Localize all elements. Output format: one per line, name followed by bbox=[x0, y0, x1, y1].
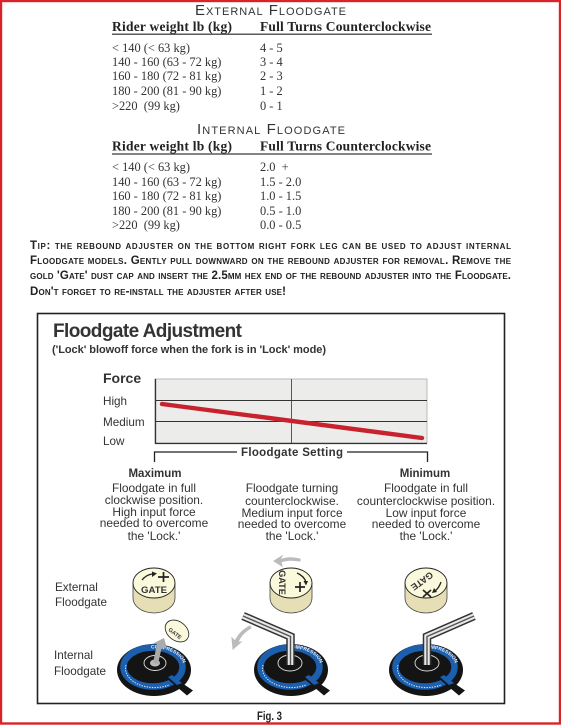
icon: internal disc maximum bbox=[117, 620, 193, 696]
column: middle bbox=[238, 481, 347, 543]
label: internal floodgate: Internal bbox=[54, 649, 93, 662]
figure caption: Fig. 3 bbox=[257, 709, 282, 723]
icon: external cap maximum bbox=[133, 568, 175, 613]
y axis labels bbox=[103, 395, 145, 448]
column: maximum: clockwise position. bbox=[105, 493, 203, 507]
table rows: external bbox=[112, 41, 283, 113]
tip text block: Don't forget to re-install the adjuster after use! bbox=[30, 286, 286, 298]
y axis title: Force bbox=[103, 370, 141, 386]
table header: external: Full Turns Counterclockwise bbox=[260, 19, 431, 34]
column: minimum: Low input force bbox=[386, 506, 467, 520]
y axis labels: Low bbox=[103, 435, 125, 448]
table rows: external: 160 - 180 (72 - 81 kg) bbox=[112, 69, 221, 83]
tip text block: Tip: the rebound adjuster on the bottom right fork leg can be used to adjust internal bbox=[30, 240, 511, 252]
y axis labels: High bbox=[103, 395, 127, 408]
grid lines and axes bbox=[155, 379, 427, 444]
red force line bbox=[162, 404, 422, 438]
column: maximum: needed to overcome bbox=[100, 516, 209, 530]
table header: internal bbox=[112, 138, 432, 155]
icon: internal disc maximum: COMPRESSION bbox=[151, 645, 186, 663]
plot background bbox=[155, 379, 427, 443]
table rows: internal: >220 (99 kg) bbox=[112, 218, 180, 232]
tip text block bbox=[30, 240, 512, 298]
icon: external cap middle: GATE bbox=[277, 570, 287, 595]
chart: force vs floodgate setting bbox=[103, 370, 428, 462]
table rows: external: < 140 (< 63 kg) bbox=[112, 41, 190, 55]
icon: internal disc minimum: COMPRESSION bbox=[431, 645, 458, 663]
table rows: external: 4 - 5 bbox=[260, 41, 283, 55]
column: maximum: High input force bbox=[112, 505, 196, 519]
icon: internal disc minimum bbox=[389, 644, 465, 696]
column: minimum: the 'Lock.' bbox=[400, 529, 452, 543]
table: internal floodgate bbox=[112, 121, 432, 232]
table header: internal: Full Turns Counterclockwise bbox=[260, 138, 431, 154]
table rows: internal: 0.0 - 0.5 bbox=[260, 218, 301, 232]
table rows: external: 0 - 1 bbox=[260, 99, 283, 113]
icon: external cap minimum: GATE bbox=[409, 570, 435, 592]
table header: external bbox=[112, 19, 432, 35]
panel heading: Floodgate Adjustment bbox=[53, 321, 243, 342]
hex tool middle bbox=[243, 616, 290, 665]
x axis bracket bbox=[154, 452, 428, 462]
table rows: internal: 1.0 - 1.5 bbox=[260, 189, 301, 203]
table rows: external: 2 - 3 bbox=[260, 69, 283, 83]
column: maximum: the 'Lock.' bbox=[128, 529, 180, 543]
table rows: internal: 1.5 - 2.0 bbox=[260, 175, 301, 189]
icon: external cap maximum: GATE bbox=[141, 585, 168, 596]
column: middle: the 'Lock.' bbox=[266, 529, 318, 543]
table rows: internal bbox=[112, 160, 301, 232]
column: minimum: Minimum bbox=[400, 468, 450, 480]
column: minimum: needed to overcome bbox=[372, 517, 481, 531]
removed dust cap: GATE bbox=[167, 627, 183, 641]
tip text block: gold 'Gate' dust cap and insert the 2.5mm hex end of the rebound adjuster into the Floodgate. bbox=[30, 270, 511, 282]
column: maximum: Maximum bbox=[128, 468, 182, 480]
column: maximum: Floodgate in full bbox=[112, 481, 196, 495]
icon: external cap minimum bbox=[405, 568, 447, 613]
table rows: external: 140 - 160 (63 - 72 kg) bbox=[112, 55, 221, 69]
table rows: internal: 160 - 180 (72 - 81 kg) bbox=[112, 189, 221, 203]
column: minimum: counterclockwise position. bbox=[357, 494, 495, 508]
column: minimum bbox=[357, 468, 495, 543]
table rows: internal: 180 - 200 (81 - 90 kg) bbox=[112, 204, 221, 218]
heading: internal floodgate: Internal Floodgate bbox=[197, 121, 345, 138]
column: middle: Floodgate turning bbox=[246, 481, 338, 495]
icon: internal disc middle: COMPRESSION bbox=[294, 645, 324, 663]
table rows: internal: 2.0 + bbox=[260, 160, 289, 174]
tip text block: Floodgate models. Gently pull downward on the rebound adjuster for removal. Remove the bbox=[30, 255, 512, 267]
column: middle: Medium input force bbox=[241, 506, 343, 520]
arrow: tool rotation bbox=[232, 626, 251, 649]
label: external floodgate: External bbox=[55, 581, 98, 594]
table: external floodgate bbox=[112, 2, 432, 113]
table rows: internal: 0.5 - 1.0 bbox=[260, 204, 301, 218]
arrow: lift dust cap bbox=[152, 638, 167, 664]
table header: internal: Rider weight lb (kg) bbox=[112, 138, 232, 154]
table header: external: Rider weight lb (kg) bbox=[112, 19, 232, 34]
heading: external floodgate: External Floodgate bbox=[195, 2, 346, 19]
label: internal floodgate: Floodgate bbox=[54, 665, 106, 678]
icon: internal disc middle bbox=[254, 644, 330, 696]
table rows: external: 180 - 200 (81 - 90 kg) bbox=[112, 84, 221, 98]
x axis label: Floodgate Setting bbox=[241, 447, 343, 459]
icon: external cap middle bbox=[270, 568, 312, 613]
table rows: external: 1 - 2 bbox=[260, 84, 283, 98]
table rows: external: 3 - 4 bbox=[260, 55, 283, 69]
table rows: external: >220 (99 kg) bbox=[112, 99, 180, 113]
hex tool minimum bbox=[427, 616, 474, 665]
table rows: internal: 140 - 160 (63 - 72 kg) bbox=[112, 175, 221, 189]
label: external floodgate: Floodgate bbox=[55, 596, 107, 609]
table rows: internal: < 140 (< 63 kg) bbox=[112, 160, 190, 174]
column: middle: needed to overcome bbox=[238, 517, 347, 531]
column: middle: counterclockwise. bbox=[245, 494, 339, 508]
column: minimum: Floodgate in full bbox=[384, 481, 468, 495]
arrow: middle cap rotation bbox=[274, 556, 300, 566]
y axis labels: Medium bbox=[103, 416, 145, 429]
column: maximum bbox=[100, 468, 209, 543]
panel subheading: ('Lock' blowoff force when the fork is in 'Lock' mode) bbox=[52, 344, 326, 356]
panel: floodgate adjustment bbox=[38, 314, 504, 704]
